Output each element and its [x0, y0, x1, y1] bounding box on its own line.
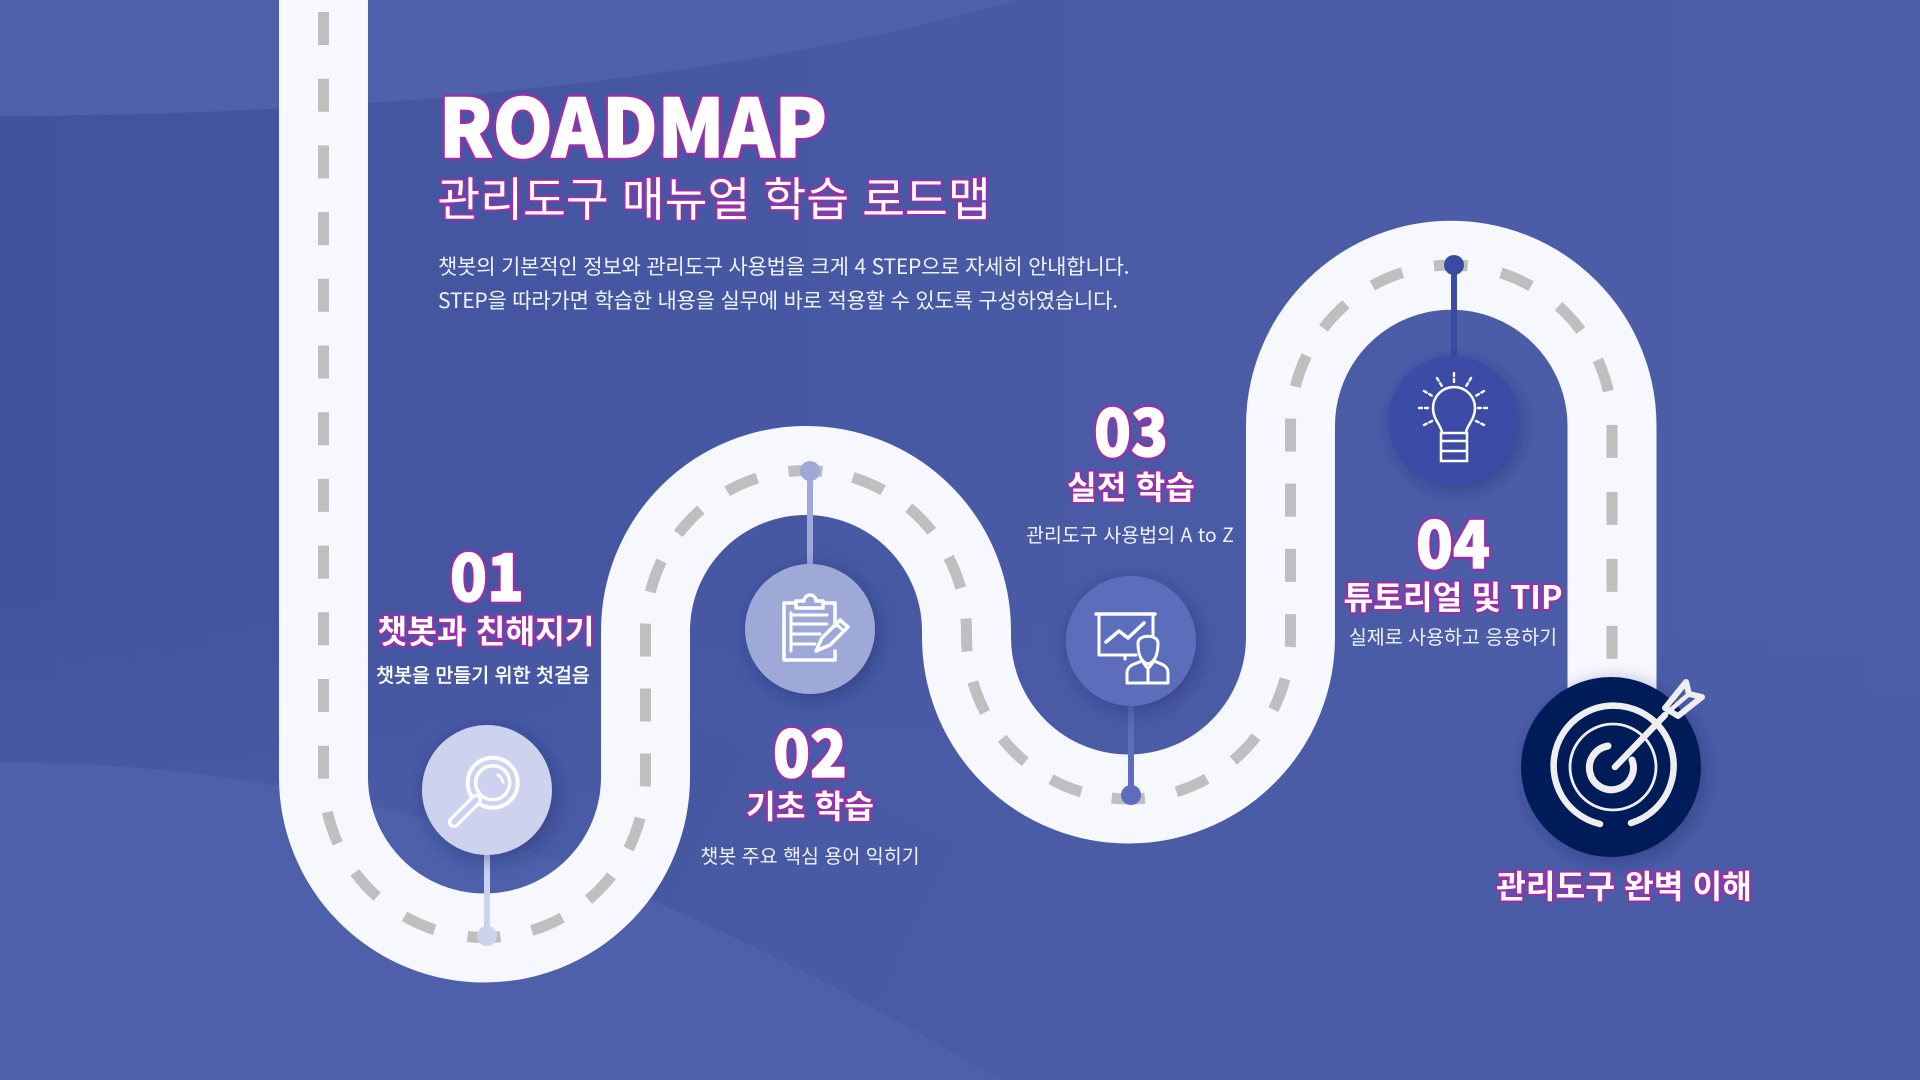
step 2 label: [700, 704, 920, 869]
step 4 label: 04: [1416, 495, 1490, 587]
step 2 pin: [800, 461, 820, 567]
goal label: 관리도구 완벽 이해: [1496, 862, 1752, 908]
step 4 circle: [1388, 356, 1518, 486]
subtitle: 관리도구 매뉴얼 학습 로드맵: [437, 163, 991, 230]
goal circle: [1521, 677, 1701, 857]
step 4 label: 튜토리얼 및 TIP: [1343, 573, 1563, 619]
step 1 label: 01: [450, 528, 524, 620]
step 2 label: 기초 학습: [746, 782, 874, 828]
step 1 label: 챗봇과 친해지기: [377, 607, 595, 653]
step 2 label: 챗봇 주요 핵심 용어 익히기: [700, 840, 920, 869]
icon: light bulb: [1419, 373, 1489, 461]
step 2 label: 02: [773, 704, 847, 796]
step 4 label: [1343, 495, 1563, 650]
title: ROADMAP: [439, 65, 827, 181]
goal marker: [1521, 677, 1702, 857]
step 3 label: 03: [1094, 383, 1168, 475]
step 2 label: 02: [773, 704, 847, 796]
step 1 marker: [422, 725, 552, 946]
intro text: STEP을 따라가면 학습한 내용을 실무에 바로 적용할 수 있도록 구성하였습니다.: [438, 285, 1118, 315]
step 3 label: 03: [1094, 383, 1168, 475]
icon: target with arrow: [1554, 682, 1702, 824]
step 1 pin: [477, 850, 497, 946]
step 2 marker: [745, 461, 875, 694]
step 1 label: 01: [450, 528, 524, 620]
step 4 label: 실제로 사용하고 응용하기: [1349, 621, 1557, 650]
intro text: 챗봇의 기본적인 정보와 관리도구 사용법을 크게 4 STEP으로 자세히 안내합니다.: [438, 251, 1129, 281]
icon: clipboard with pencil: [784, 595, 848, 660]
road lane dashes: [324, 12, 1612, 938]
step 4 label: 04: [1416, 495, 1490, 587]
step 3 marker: [1066, 576, 1196, 805]
step 3 circle: [1066, 576, 1196, 706]
step 1 label: 챗봇을 만들기 위한 첫걸음: [376, 659, 590, 688]
step 3 label: 관리도구 사용법의 A to Z: [1026, 519, 1234, 548]
step 1 label: [376, 528, 595, 688]
step 4 marker: [1388, 255, 1518, 486]
step 3 label: 실전 학습: [1067, 463, 1195, 509]
icon: magnifier: [454, 758, 518, 822]
step 3 label: [1026, 383, 1234, 548]
title: ROADMAP: [439, 65, 827, 181]
step 3 pin: [1121, 700, 1141, 805]
step 2 circle: [745, 564, 875, 694]
step 4 pin: [1444, 255, 1464, 361]
intro text: [438, 251, 1129, 315]
road: [324, 0, 1612, 938]
icon: presenter with chart: [1096, 614, 1168, 683]
step 1 circle: [422, 725, 552, 855]
